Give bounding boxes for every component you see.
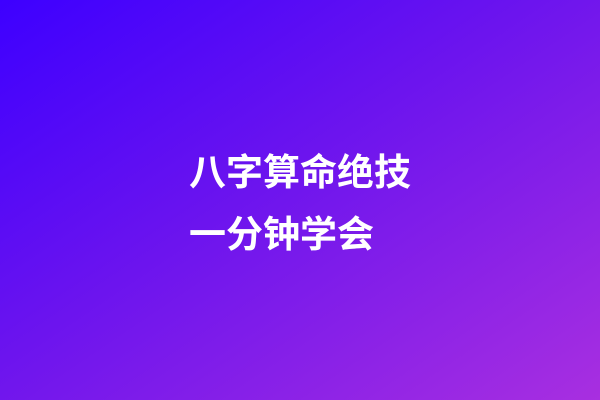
title line 2: 一分钟学会	[189, 214, 374, 255]
title line 1: 八字算命绝技	[189, 152, 411, 193]
